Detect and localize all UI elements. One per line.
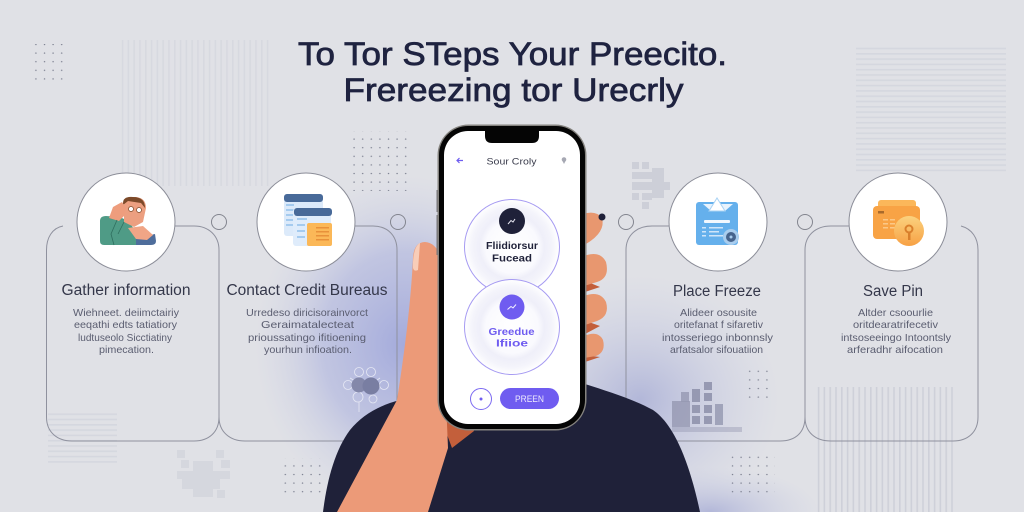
text block: save pin: arferadhr aifocation [847,344,943,356]
text block: gather information: eeqathi edts tatiatiory [74,319,178,331]
text block: save pin: Altder csoourlie [858,307,933,319]
phone [436,124,586,430]
text block: contact credit bureaus: yourhun infioation. [264,344,352,356]
title: Frereezing tor Urecrly [344,72,684,108]
status circle: greedue [464,280,560,374]
text block: gather information: Wiehneet. deiimctairiy [73,307,180,319]
phone header: Sour Croly [486,156,537,168]
heading: contact credit bureaus: Contact Credit Bureaus [226,282,388,299]
panel: contact credit bureaus [219,173,406,441]
panel: save pin [798,173,978,441]
status circle: greedue: Ifiioe [496,338,529,350]
phone header [457,156,566,168]
text block: save pin [841,307,952,356]
primary button: PREEN [515,394,544,404]
panel: gather information [46,173,226,441]
status circle: greedue: Greedue [488,327,535,338]
primary button [500,388,559,409]
text block: place freeze: arfatsalor sifouatiion [670,344,763,356]
phone notch [485,131,539,143]
text block: save pin: intsoseeingo Intoontsly [841,332,952,344]
heading: place freeze: Place Freeze [673,283,761,300]
icon: thinking person [100,197,156,245]
text block: place freeze: oritefanat f sifaretiv [674,319,764,331]
text block: place freeze: intosseriego inbonnsly [662,332,774,344]
text block: contact credit bureaus: Urredeso diricisorainvorct [246,307,368,319]
icon: freeze form [696,198,739,245]
status circle: frozen: Fucead [492,252,532,264]
text block: gather information: ludtuseolo Sicctiatiny [78,332,173,344]
icon: network cluster [344,368,388,412]
title [298,36,727,108]
icon: documents [284,194,332,246]
text block: gather information [73,307,180,356]
status circle: frozen [464,200,560,294]
status circle: frozen: Fliidiorsur [486,240,538,252]
text block: place freeze: Alideer osousite [680,307,757,319]
person body [323,384,700,512]
text block: contact credit bureaus: Geraimatalecteat [261,319,354,331]
text block: save pin: oritdearatrifecetiv [853,319,939,331]
panel: place freeze [618,173,805,441]
heading: gather information: Gather information [62,282,190,299]
heading: save pin: Save Pin [863,283,923,300]
text block: contact credit bureaus [246,307,368,356]
text block: contact credit bureaus: prioussatingo ifitioening [248,332,366,344]
fingers [582,213,607,362]
text block: gather information: pimecation. [99,344,154,356]
title: To Tor STeps Your Preecito. [298,36,727,72]
small round button [470,388,492,410]
icon: building blocks [672,382,742,432]
icon: wallet with key [873,200,924,246]
text block: place freeze [662,307,774,356]
hand and thumb [337,242,474,512]
